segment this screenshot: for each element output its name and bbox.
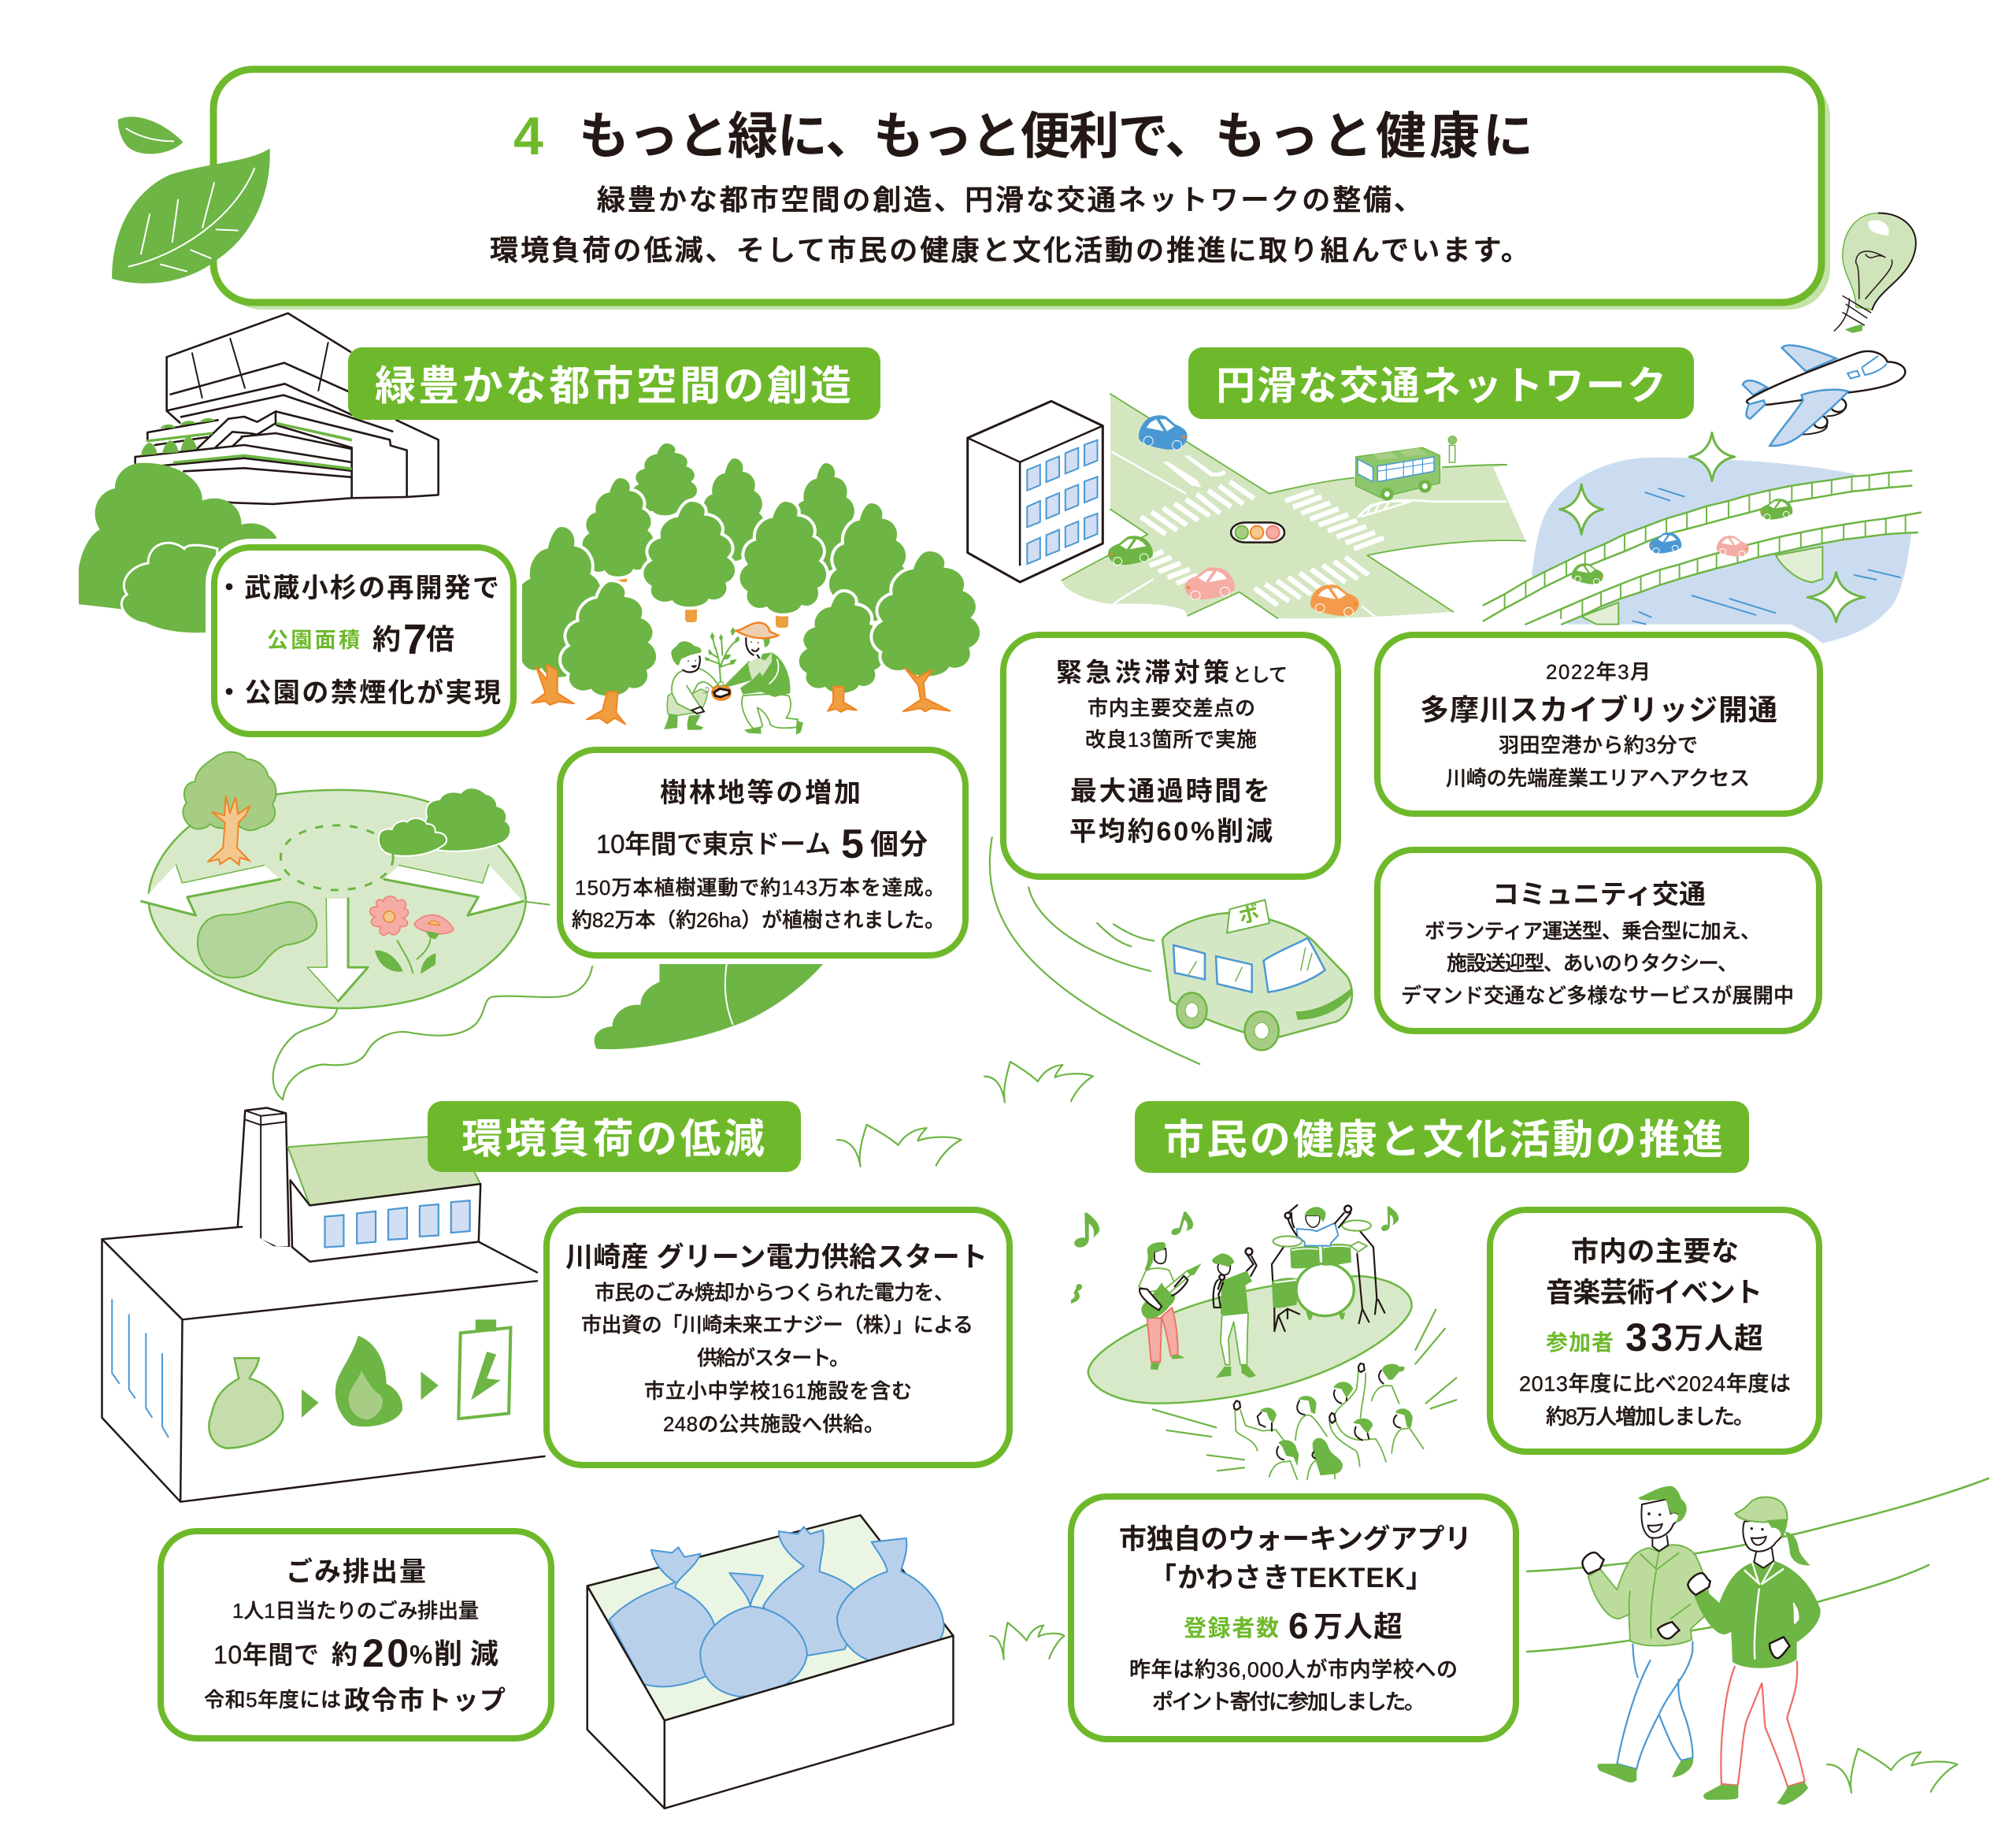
icon: grass tufts	[837, 1062, 1957, 1793]
illustration: concert stage and crowd	[1071, 1205, 1456, 1479]
panel: woodland increase: 約82万本（約26ha）が植樹されました。	[572, 908, 945, 932]
subtitle line 2: 環境負荷の低減、そして市民の健康と文化活動の推進に取り組んでいます。	[490, 234, 1529, 266]
panel: congestion measures: 平均約60%削減	[1069, 817, 1273, 847]
icon: battery	[458, 1319, 510, 1419]
panel: green electricity: 市立小中学校161施設を含む	[644, 1379, 912, 1403]
bus sign text: ボ	[1236, 900, 1262, 929]
panel: waste reduction: 20	[362, 1631, 409, 1675]
icon: big leaf	[112, 149, 270, 284]
title number: 4	[513, 106, 543, 166]
panel: woodland increase: 150万本植樹運動で約143万本を達成。	[575, 876, 945, 900]
icon: flame	[335, 1336, 402, 1426]
panel: Musashi-Kosugi: ・公園の禁煙化が実現	[216, 677, 501, 708]
dashed planting circle	[280, 825, 393, 890]
icon: traffic light	[1231, 522, 1284, 543]
icon: flowers	[370, 896, 454, 974]
illustration: walking couple	[1582, 1486, 1821, 1805]
panel: congestion measures: 最大通過時間を	[1070, 777, 1270, 807]
illustration: bush below tree panel	[595, 952, 832, 1049]
woman	[1688, 1497, 1821, 1805]
panel: green electricity: 市民のごみ焼却からつくられた電力を、	[595, 1281, 954, 1304]
illustration: bushes behind callout	[79, 463, 276, 634]
singer	[1212, 1248, 1257, 1378]
panel: community transport: 施設送迎型、あいのりタクシー、	[1447, 951, 1738, 975]
panel: congestion measures: として	[1232, 665, 1288, 686]
illustration: people planting a sapling	[664, 622, 803, 735]
panel: waste reduction: %	[410, 1640, 432, 1669]
icon: cars on crossroads	[1108, 415, 1359, 616]
panel: Tamagawa Sky Bridge: 羽田空港から約3分で	[1499, 733, 1698, 757]
icon: airplane	[1743, 345, 1905, 446]
panel: music events	[1490, 1210, 1819, 1452]
panel: Musashi-Kosugi: 約	[372, 623, 401, 655]
text: コミュニティ交通	[1492, 880, 1706, 910]
subtitle line 1: 緑豊かな都市空間の創造、円滑な交通ネットワークの整備、	[597, 184, 1422, 216]
heading band: environmental load	[428, 1101, 801, 1172]
panel: green electricity: 供給がスタート。	[697, 1346, 850, 1370]
illustration: park map with arrows	[142, 752, 592, 1100]
panel: Tamagawa Sky Bridge: 多摩川スカイブリッジ開通	[1420, 693, 1777, 726]
text: 樹林地等の増加	[660, 778, 861, 808]
illustration: path lines behind walkers	[1527, 1478, 1988, 1652]
panel: woodland increase	[560, 750, 965, 955]
smoke line	[273, 966, 592, 1100]
panel: waste reduction: 政令市トップ	[344, 1686, 506, 1715]
text: 川崎産 グリーン電力供給スタート	[565, 1242, 988, 1273]
text: ごみ排出量	[286, 1557, 426, 1587]
icon: arrow	[421, 1371, 439, 1400]
icon: park tree	[183, 752, 276, 865]
panel: green electricity	[547, 1210, 1010, 1465]
panel: music events: 2013年度に比べ2024年度は	[1519, 1372, 1791, 1396]
drum kit	[1272, 1220, 1384, 1331]
panel: congestion measures: 市内主要交差点の	[1088, 696, 1255, 720]
icon: down arrow	[307, 899, 368, 1001]
panel: community transport: デマンド交通など多様なサービスが展開中	[1401, 984, 1794, 1007]
heading band: traffic network: 円滑な交通ネットワーク	[1216, 364, 1666, 408]
text: 2022年3月	[1546, 660, 1651, 684]
guitarist	[1139, 1242, 1202, 1370]
panel: Tamagawa Sky Bridge: 川崎の先端産業エリアへアクセス	[1446, 766, 1750, 790]
pond	[198, 902, 317, 977]
panel: waste reduction: 削減	[434, 1638, 498, 1670]
panel: waste reduction: 1人1日当たりのごみ排出量	[232, 1599, 479, 1623]
illustration: box of garbage bags	[587, 1515, 953, 1808]
title: もっと便利で、	[873, 108, 1215, 165]
heading band: green urban space: 緑豊かな都市空間の創造	[375, 364, 851, 410]
icon: left arrow	[142, 865, 280, 915]
title: もっと健康に	[1215, 108, 1533, 165]
panel: Musashi-Kosugi: 倍	[426, 623, 454, 655]
panel: music events: 約8万人増加しました。	[1546, 1405, 1755, 1429]
icon: garbage bag	[209, 1358, 283, 1449]
illustration: light bulb	[1834, 213, 1916, 333]
illustration: community bus with speed lines	[990, 837, 1352, 1064]
title	[579, 108, 1533, 165]
panel: Musashi-Kosugi: 公園面積	[267, 629, 360, 652]
panel: woodland increase: 個分	[870, 828, 928, 860]
text: ・武蔵小杉の再開発で	[216, 573, 499, 603]
illustration: crossroads	[1062, 394, 1525, 618]
panel: walking app	[1071, 1497, 1516, 1739]
drummer	[1285, 1205, 1351, 1246]
panel: green electricity: 248の公共施設へ供給。	[663, 1412, 884, 1436]
icon: cars on bridge	[1572, 499, 1792, 584]
illustration: office block	[968, 401, 1102, 582]
icon: right arrow	[384, 865, 523, 915]
title: もっと緑に、	[579, 108, 876, 165]
illustration: river with sky bridge	[1484, 345, 1921, 644]
text: 市独自のウォーキングアプリ	[1119, 1524, 1472, 1555]
heading band: health and culture	[1135, 1101, 1749, 1173]
panel: green electricity: 市出資の「川崎未来エナジー（株）」による	[581, 1313, 973, 1337]
man	[1582, 1486, 1709, 1782]
child	[664, 641, 718, 730]
panel: walking app: 登録者数	[1184, 1615, 1279, 1641]
crowd	[1234, 1363, 1424, 1479]
panel: music events: 万人超	[1674, 1322, 1763, 1355]
heading band: health and culture: 市民の健康と文化活動の推進	[1163, 1118, 1723, 1163]
text: 市内の主要な	[1571, 1237, 1739, 1267]
panel: walking app: 万人超	[1314, 1611, 1403, 1643]
panel: music events: 音楽芸術イベント	[1546, 1278, 1762, 1308]
panel: walking app: ポイント寄付に参加しました。	[1152, 1690, 1425, 1714]
panel: Tamagawa Sky Bridge	[1377, 635, 1820, 814]
panel: community transport	[1377, 850, 1819, 1031]
text: 緊急渋滞対策	[1056, 658, 1229, 687]
panel shadow and frame	[220, 76, 1830, 310]
main title panel	[213, 69, 1830, 310]
panel: Musashi-Kosugi	[214, 547, 513, 734]
icon: bus stop	[1443, 436, 1506, 467]
icon: small leaf	[118, 117, 183, 154]
panel: waste reduction	[161, 1531, 551, 1738]
panel: Musashi-Kosugi: 7	[403, 616, 427, 663]
panel: congestion measures: 改良13箇所で実施	[1085, 728, 1257, 751]
panel: woodland increase: 10年間で東京ドーム	[596, 829, 831, 859]
panel: walking app: 「かわさきTEKTEK」	[1149, 1563, 1433, 1593]
heading band: environmental load: 環境負荷の低減	[461, 1117, 765, 1163]
heading band: green urban space	[348, 347, 880, 420]
icon: bus	[1356, 447, 1440, 501]
panel: waste reduction: 10年間で	[213, 1641, 319, 1669]
panel: music events: 33	[1625, 1315, 1673, 1359]
heading band: traffic network	[1188, 347, 1694, 419]
icon: bushes	[379, 788, 510, 856]
adult	[724, 622, 803, 735]
sapling	[705, 627, 739, 700]
icon: arrow	[302, 1389, 319, 1418]
panel: waste reduction: 約	[332, 1640, 358, 1669]
panel: waste reduction: 令和5年度には	[204, 1688, 341, 1712]
illustration: tree trunks	[532, 664, 950, 724]
panel: music events: 参加者	[1546, 1330, 1614, 1355]
panel: walking app: 昨年は約36,000人が市内学校への	[1129, 1658, 1458, 1682]
panel: walking app: 6	[1288, 1605, 1309, 1646]
illustration: rooftop-greened building	[135, 313, 439, 504]
illustration: forest	[510, 442, 981, 697]
icon: sparkles	[1560, 432, 1865, 622]
illustration: factory	[102, 1108, 545, 1502]
panel: congestion measures	[1003, 635, 1338, 877]
stage	[1088, 1276, 1412, 1404]
speed lines	[1153, 1310, 1456, 1471]
icon: music notes	[1071, 1207, 1399, 1304]
panel: community transport: ボランティア運送型、乗合型に加え、	[1425, 919, 1761, 943]
panel: woodland increase: 5	[841, 822, 864, 867]
